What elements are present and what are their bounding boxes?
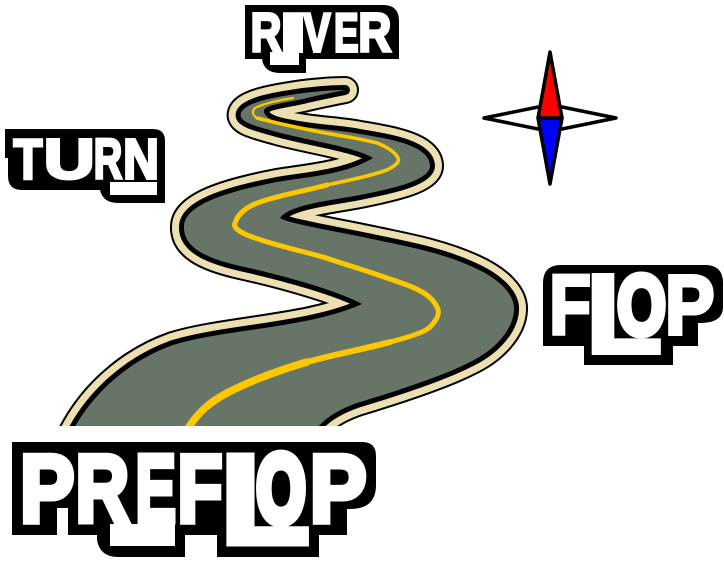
label: river: I bbox=[279, 2, 307, 64]
label: river: V bbox=[304, 2, 331, 64]
label: turn: U bbox=[44, 128, 95, 192]
label: preflop: P bbox=[310, 436, 366, 542]
label: turn: N bbox=[123, 128, 159, 192]
label: preflop: O bbox=[257, 436, 305, 542]
label: flop: L bbox=[586, 251, 662, 377]
label: flop: O bbox=[617, 258, 666, 352]
label: preflop: P bbox=[20, 436, 74, 542]
label: flop bbox=[543, 251, 723, 377]
label: river: R bbox=[358, 2, 391, 64]
winding road bbox=[72, 90, 514, 432]
label: turn: T bbox=[14, 128, 43, 192]
label: preflop: R bbox=[76, 436, 129, 542]
label: flop: F bbox=[549, 258, 591, 352]
label: river: R bbox=[251, 2, 281, 64]
label: preflop: F bbox=[178, 436, 222, 542]
label: flop: P bbox=[665, 258, 714, 352]
label: turn: R bbox=[94, 128, 122, 192]
yellow centre line bbox=[187, 98, 438, 430]
label: river: E bbox=[334, 2, 359, 64]
label: turn bbox=[5, 128, 165, 203]
label: river bbox=[245, 2, 399, 73]
label: preflop: E bbox=[135, 436, 176, 542]
compass icon bbox=[484, 52, 616, 184]
label: preflop bbox=[12, 428, 376, 564]
